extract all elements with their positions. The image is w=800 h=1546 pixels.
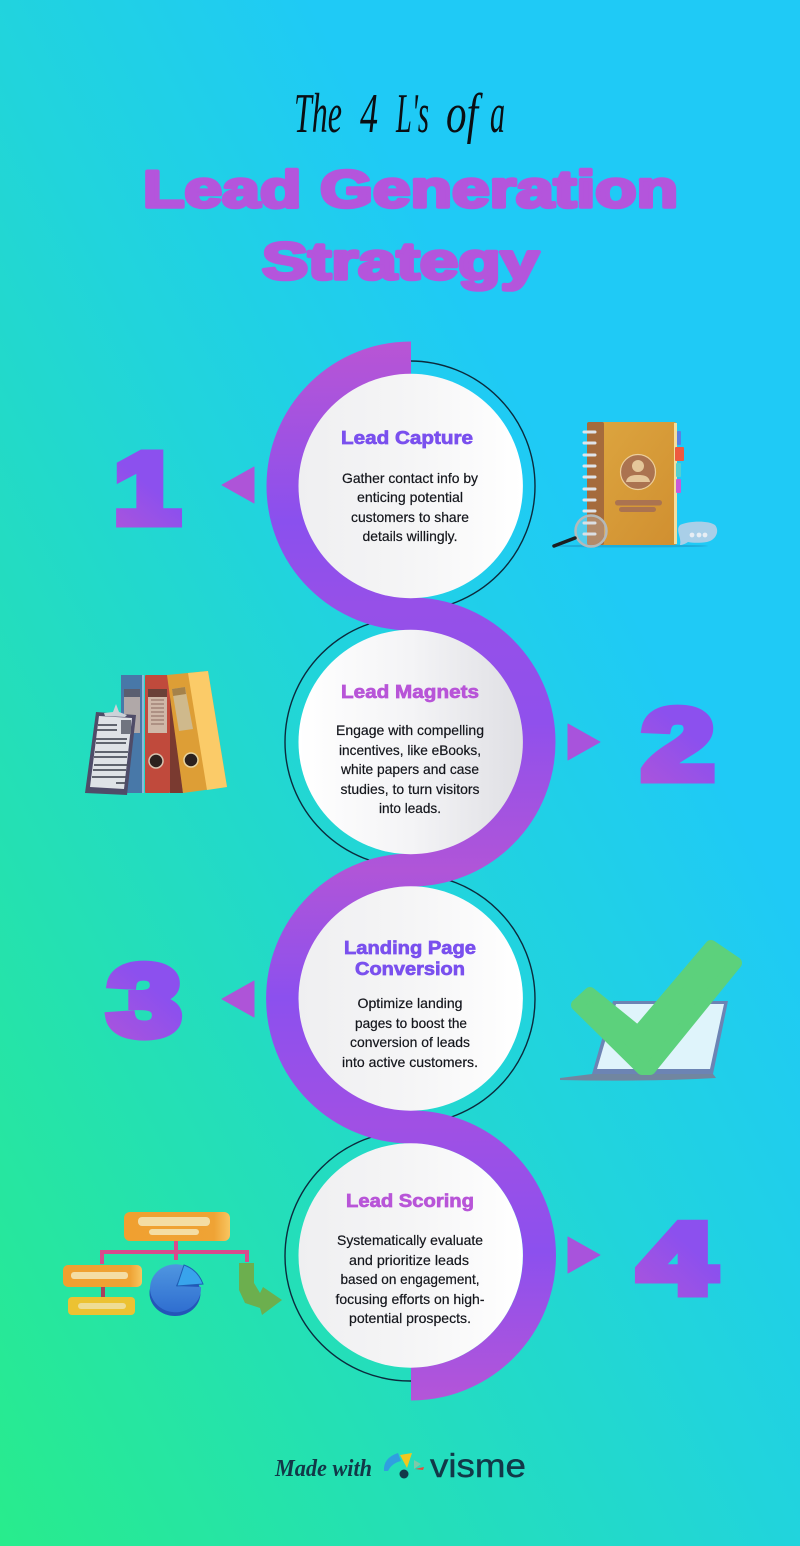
number 3: 3 xyxy=(108,945,181,1057)
script subtitle: L's xyxy=(395,83,429,145)
script subtitle: 4 xyxy=(360,83,378,145)
body 3: conversion of leads xyxy=(350,1034,470,1050)
heading 3: Landing Page xyxy=(344,938,476,958)
body 3: into active customers. xyxy=(342,1054,478,1070)
icon: binders and clipboard xyxy=(85,671,227,795)
body 3: Optimize landing xyxy=(358,995,462,1011)
body 4 xyxy=(336,1232,485,1326)
body 4: focusing efforts on high- xyxy=(336,1291,485,1307)
main heading: Strategy xyxy=(262,233,539,291)
body 4: Systematically evaluate xyxy=(337,1232,483,1248)
thin outline circles xyxy=(285,361,535,1381)
body 4: and prioritize leads xyxy=(349,1252,469,1268)
body 2: into leads. xyxy=(379,800,441,816)
body 4: potential prospects. xyxy=(349,1310,471,1326)
step 1: lead capture xyxy=(114,374,717,598)
body 3 xyxy=(342,995,478,1070)
step 3: landing page conversion xyxy=(108,886,736,1111)
body 2: studies, to turn visitors xyxy=(340,781,480,797)
heading 2: Lead Magnets xyxy=(341,682,479,702)
script subtitle: a xyxy=(490,83,505,145)
step 2: lead magnets xyxy=(85,630,714,854)
footer: made with visme xyxy=(274,1447,526,1484)
purple S-curve ribbon xyxy=(283,358,540,1384)
arrow 1 xyxy=(222,467,254,503)
circle 1 xyxy=(298,374,523,598)
step 4: lead scoring xyxy=(63,1143,716,1368)
heading 1: Lead Capture xyxy=(341,428,473,448)
body 2 xyxy=(336,722,484,816)
number 4: 4 xyxy=(639,1203,716,1315)
number 1: 1 xyxy=(114,433,180,545)
circle 2 xyxy=(298,630,523,854)
heading 3 xyxy=(344,938,476,979)
script subtitle: of xyxy=(446,83,483,145)
body 1: customers to share xyxy=(351,509,469,525)
script subtitle xyxy=(294,83,505,145)
body 4: based on engagement, xyxy=(340,1271,480,1287)
arrow 4 xyxy=(568,1237,600,1273)
heading 3: Conversion xyxy=(355,959,465,979)
title xyxy=(143,83,678,291)
body 2: white papers and case xyxy=(340,761,479,777)
script subtitle: The xyxy=(294,83,342,145)
circle 3 xyxy=(298,886,523,1111)
icon: flowchart, pie and arrow xyxy=(63,1212,282,1316)
body 2: Engage with compelling xyxy=(336,722,484,738)
heading 4: Lead Scoring xyxy=(346,1191,474,1211)
body 1 xyxy=(342,470,478,544)
visme wordmark: visme xyxy=(430,1447,526,1484)
body 1: enticing potential xyxy=(357,489,463,505)
number 2: 2 xyxy=(642,689,714,801)
body 2: incentives, like eBooks, xyxy=(339,742,481,758)
circle 4 xyxy=(298,1143,523,1368)
arrow 3 xyxy=(222,981,254,1017)
main heading: Lead Generation xyxy=(143,161,678,219)
made with script: Made with xyxy=(274,1456,372,1482)
arrow 2 xyxy=(568,724,600,760)
icon: laptop with check mark xyxy=(560,946,736,1081)
body 1: details willingly. xyxy=(362,528,458,544)
body 3: pages to boost the xyxy=(355,1015,467,1031)
icon: contact notebook xyxy=(552,422,717,548)
visme logo mark xyxy=(384,1453,424,1478)
body 1: Gather contact info by xyxy=(342,470,478,486)
main heading xyxy=(143,161,678,291)
